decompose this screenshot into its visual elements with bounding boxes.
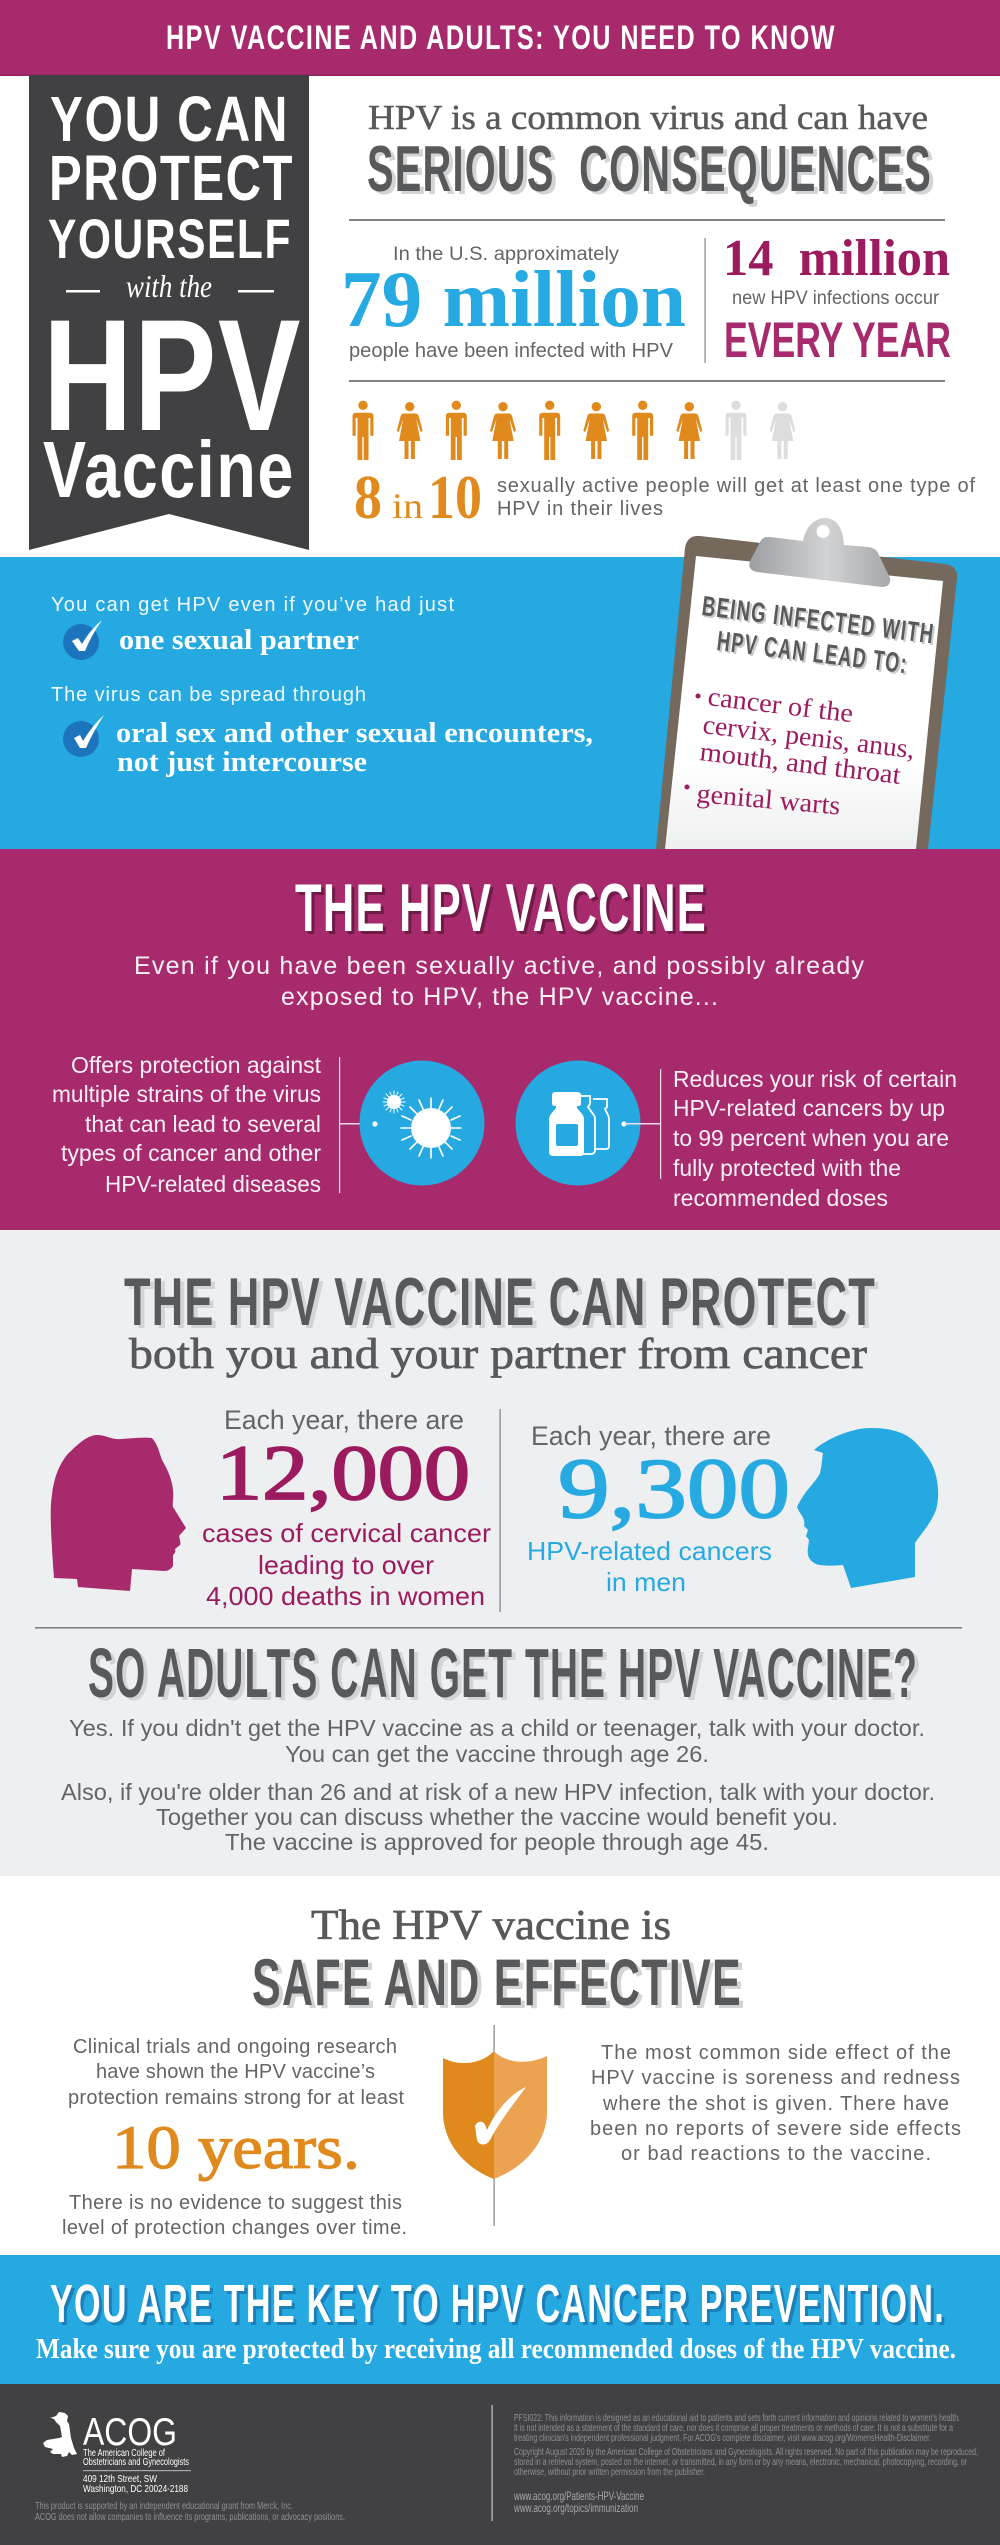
body text: adults: Together you can discuss whether the vaccine would benefit you. — [156, 1804, 838, 1830]
clipboard list: cervix, penis, anus, — [701, 709, 916, 764]
disclaimer — [514, 2413, 978, 2478]
heading — [124, 1264, 876, 1378]
left benefit text: that can lead to several — [85, 1111, 321, 1137]
text: oral sex: not just intercourse — [117, 746, 367, 778]
icon: woman head — [51, 1435, 186, 1591]
stat: 8 in 10: 8 — [354, 464, 382, 532]
stat: women: 4,000 deaths in women — [206, 1581, 485, 1611]
right text: been no reports of severe side effects — [590, 2118, 961, 2140]
right benefit text: fully protected with the — [673, 1155, 901, 1181]
right benefit text: HPV-related cancers by up — [673, 1095, 945, 1121]
right benefit text: Reduces your risk of certain — [673, 1066, 957, 1092]
disclaimer: otherwise, without prior written permission from the publisher. — [514, 2467, 705, 2478]
body text: adults: Also, if you're older than 26 and at risk of a new HPV infection, talk with your doctor. — [61, 1779, 935, 1805]
clipboard list: genital warts — [695, 778, 842, 821]
ACOG wordmark and address: ACOG — [83, 2411, 177, 2454]
ACOG wordmark and address — [83, 2411, 191, 2495]
text: one sexual partner — [51, 594, 454, 660]
icon: metal clip — [749, 518, 890, 587]
left text: Clinical trials and ongoing research — [73, 2036, 397, 2058]
body text: adults: You can get the vaccine through age 26. — [285, 1741, 709, 1767]
text: oral sex: The virus can be spread through — [51, 684, 366, 706]
stat: 79 million: 79 million — [341, 256, 686, 344]
clipboard list — [684, 681, 916, 821]
panel: dark ribbon banner — [29, 75, 309, 550]
8 in 10 caption: sexually active people will get at least one type of — [497, 475, 975, 497]
stat: women: leading to over — [258, 1550, 434, 1580]
icon: virus — [360, 1060, 484, 1186]
stat: men: HPV-related cancers — [527, 1536, 772, 1566]
stat: 79 million: In the U.S. approximately — [393, 244, 620, 265]
stat: 10 years: 10 years. — [112, 2115, 360, 2182]
stat: 79 million: people have been infected with HPV — [349, 340, 674, 362]
ribbon heading lines: YOU CAN — [50, 83, 289, 155]
text: one sexual partner: You can get HPV even if you’ve had just — [51, 594, 454, 616]
body text: adults: The vaccine is approved for people through age 45. — [225, 1829, 769, 1855]
stat: 14 million: 14 million — [723, 230, 950, 287]
icon: check 1 — [63, 620, 102, 660]
left benefit text: HPV-related diseases — [105, 1171, 321, 1197]
stat: 8 in 10 — [354, 464, 482, 532]
panel: call to action — [0, 2255, 1000, 2384]
heading: THE HPV VACCINE — [295, 870, 707, 946]
icon: shield — [443, 2051, 547, 2179]
clipboard heading — [700, 590, 936, 679]
right text: where the shot is given. There have — [602, 2093, 949, 2115]
stat: men: 9,300 — [558, 1440, 790, 1536]
left text — [68, 2036, 404, 2109]
header band — [0, 0, 1000, 76]
left text lower: There is no evidence to suggest this — [69, 2192, 402, 2214]
stat: 14 million — [723, 230, 951, 368]
body text: adults: Yes. If you didn't get the HPV vaccine as a child or teenager, talk with your doctor. — [69, 1715, 925, 1741]
8 in 10 caption: HPV in their lives — [497, 498, 663, 520]
text: one sexual partner: one sexual partner — [119, 624, 359, 656]
icon: man head — [797, 1428, 938, 1588]
clipboard — [656, 518, 957, 849]
stat: women: Each year, there are — [224, 1405, 464, 1435]
panel: serious consequences — [341, 98, 975, 532]
ribbon heading lines: HPV — [43, 286, 302, 464]
stat: 8 in 10: in — [392, 486, 423, 526]
ACOG wordmark and address: Washington, DC 20024-2188 — [83, 2483, 188, 2495]
urls — [513, 2489, 644, 2515]
heading — [367, 98, 932, 205]
panel: safe and effective — [62, 1903, 961, 2239]
ribbon heading lines: Vaccine — [43, 425, 295, 514]
heading — [252, 1903, 742, 2019]
left text: protection remains strong for at least — [68, 2087, 404, 2109]
stat: men: in men — [606, 1567, 686, 1597]
right text: HPV vaccine is soreness and redness — [591, 2067, 960, 2089]
connector left — [339, 1057, 375, 1193]
left benefit text — [52, 1052, 322, 1197]
intro text: exposed to HPV, the HPV vaccine... — [281, 983, 718, 1011]
left benefit text: types of cancer and other — [61, 1140, 321, 1166]
right benefit text: to 99 percent when you are — [673, 1125, 949, 1151]
stat: women — [202, 1405, 491, 1611]
text: oral sex: oral sex and other sexual encounters, — [116, 717, 593, 749]
right text: The most common side effect of the — [601, 2042, 951, 2064]
clipboard list: cancer of the — [706, 681, 855, 728]
clipboard list: mouth, and throat — [698, 736, 903, 790]
connector right — [625, 1069, 661, 1179]
stat: women: 12,000 — [216, 1429, 470, 1516]
heading: HPV is a common virus and can have — [368, 98, 928, 137]
ribbon heading lines: YOURSELF — [48, 207, 292, 270]
panel: footer — [0, 2384, 1000, 2545]
left text: have shown the HPV vaccine’s — [96, 2061, 375, 2083]
panel: protect both — [0, 1230, 1000, 1876]
text: oral sex — [51, 684, 593, 778]
ribbon heading lines: PROTECT — [49, 142, 294, 214]
stat: 14 million: new HPV infections occur — [732, 288, 940, 309]
8 in 10 caption — [497, 475, 975, 520]
support statement: This product is supported by an independent educational grant from Merck, Inc. — [35, 2500, 293, 2512]
right text: or bad reactions to the vaccine. — [621, 2143, 931, 2165]
left benefit text: Offers protection against — [71, 1052, 322, 1078]
icon: vaccine vials — [516, 1060, 640, 1186]
intro text — [134, 952, 864, 1011]
ACOG wordmark and address: The American College of — [83, 2447, 165, 2459]
right benefit text: recommended doses — [673, 1185, 888, 1211]
heading: both you and your partner from cancer — [129, 1331, 867, 1378]
ACOG wordmark and address: 409 12th Street, SW — [83, 2473, 157, 2485]
left text lower — [62, 2192, 407, 2239]
heading: The HPV vaccine is — [311, 1903, 671, 1949]
panel: the HPV vaccine — [0, 849, 1000, 1230]
intro text: Even if you have been sexually active, and possibly already — [134, 952, 864, 980]
body text: adults — [61, 1715, 935, 1855]
ribbon heading lines: with the — [126, 268, 212, 304]
right benefit text — [673, 1066, 957, 1211]
panel: blue risk section — [0, 557, 1000, 849]
left text lower: level of protection changes over time. — [62, 2217, 407, 2239]
heading: SAFE AND EFFECTIVE — [252, 1945, 742, 2019]
right text — [590, 2042, 961, 2165]
icon: check 2 — [63, 715, 104, 757]
support statement: ACOG does not allow companies to influence its programs, publications, or advocacy positions. — [35, 2511, 345, 2523]
stat: 8 in 10: 10 — [428, 464, 482, 532]
urls: www.acog.org/topics/immunization — [513, 2501, 638, 2515]
ACOG wordmark and address: Obstetricians and Gynecologists — [83, 2456, 189, 2468]
support statement — [35, 2500, 345, 2523]
ribbon heading lines — [43, 83, 302, 514]
stat: men — [527, 1421, 790, 1597]
urls: www.acog.org/Patients-HPV-Vaccine — [513, 2489, 644, 2503]
left benefit text: multiple strains of the virus — [52, 1081, 321, 1107]
icon: ACOG figure logo — [43, 2412, 77, 2457]
icon row: 8 in 10 people — [352, 401, 796, 460]
stat: women: cases of cervical cancer — [202, 1518, 491, 1548]
stat: men: Each year, there are — [531, 1421, 771, 1451]
